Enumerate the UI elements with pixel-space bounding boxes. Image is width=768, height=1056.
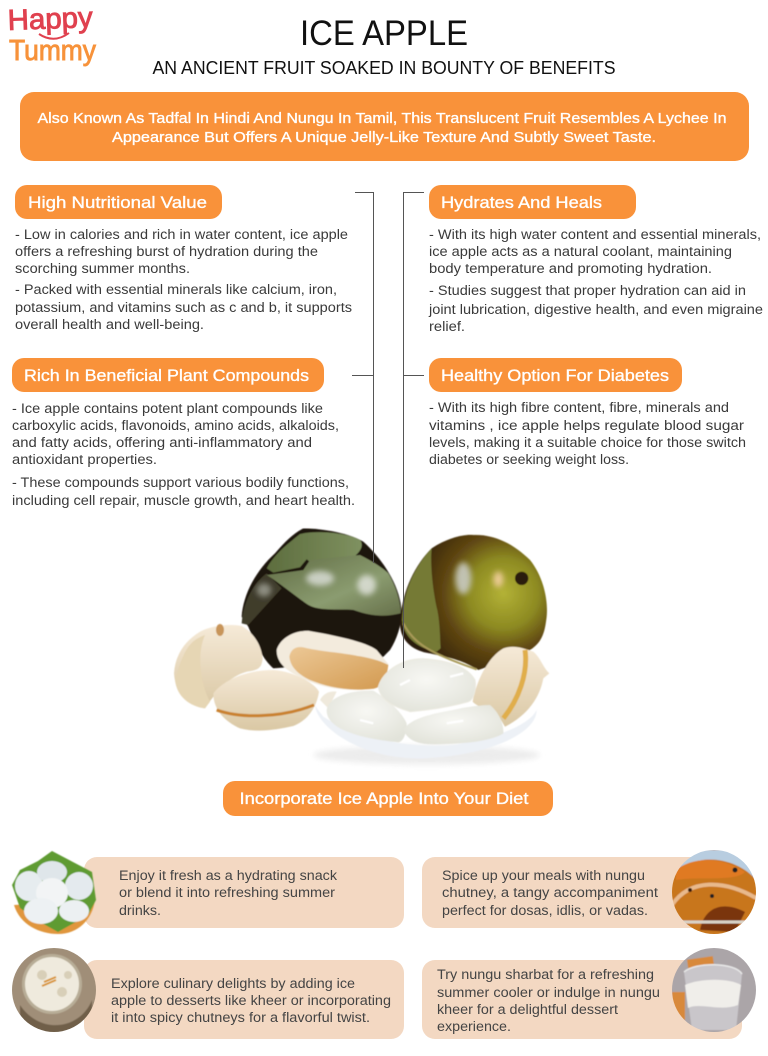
panel: high nutritional value: - Packed with essential minerals like calcium, iron, — [15, 282, 337, 297]
connector lines — [352, 192, 424, 668]
card: culinary delights — [11, 947, 404, 1039]
icon: bowl of ice apples — [12, 851, 96, 934]
panel: hydrates and heals: - Studies suggest that proper hydration can aid in — [429, 283, 746, 298]
card: nungu chutney — [422, 849, 757, 935]
heading: incorporate ice apple — [223, 781, 553, 816]
panel: high nutritional value — [15, 185, 352, 332]
panel: high nutritional value: - Low in calories and rich in water content, ice apple — [15, 227, 348, 242]
panel: healthy option for diabetes: levels, making it a suitable choice for those switch — [429, 435, 746, 450]
heading: healthy option for diabetes: Healthy Option For Diabetes — [441, 366, 669, 385]
white plate — [315, 705, 537, 758]
right whole fruit — [400, 535, 547, 670]
subtitle: AN ANCIENT FRUIT SOAKED IN BOUNTY OF BENEFITS — [152, 58, 616, 78]
jelly fruit pieces — [320, 659, 503, 744]
logo: Happy Tummy: Happy — [7, 2, 94, 37]
right seed — [473, 647, 549, 727]
panel: rich in beneficial plant compounds: antioxidant properties. — [12, 452, 157, 467]
heading: high nutritional value: High Nutritional Value — [28, 193, 207, 212]
plate shadow — [313, 746, 540, 764]
icon: chutney — [671, 849, 757, 935]
card: culinary delights: Explore culinary delights by adding ice — [111, 976, 355, 991]
panel: high nutritional value: potassium, and vitamins such as c and b, it supports — [15, 300, 352, 315]
heading: rich in beneficial plant compounds — [12, 358, 324, 392]
panel: rich in beneficial plant compounds: - These compounds support various bodily functions, — [12, 475, 349, 490]
logo: Happy Tummy — [7, 2, 96, 67]
heading: rich in beneficial plant compounds: Rich In Beneficial Plant Compounds — [24, 366, 309, 385]
card: nungu sharbat: experience. — [437, 1019, 511, 1034]
intro banner: Appearance But Offers A Unique Jelly-Like Texture And Subtly Sweet Taste. — [112, 129, 656, 146]
panel: rich in beneficial plant compounds: and fatty acids, offering anti-inflammatory and — [12, 435, 312, 450]
intro banner — [20, 92, 749, 161]
intro banner: Also Known As Tadfal In Hindi And Nungu In Tamil, This Translucent Fruit Resembles A Lychee In — [38, 110, 726, 127]
panel: hydrates and heals: joint lubrication, digestive health, and even migraine — [428, 302, 763, 317]
panel: hydrates and heals: - With its high water content and essential minerals, — [429, 227, 761, 242]
panel: high nutritional value: overall health and well-being. — [15, 317, 204, 332]
card: nungu sharbat: kheer for a delightful dessert — [437, 1002, 618, 1017]
logo: Happy Tummy: Tummy — [9, 35, 96, 67]
card: nungu sharbat: Try nungu sharbat for a refreshing — [437, 967, 654, 982]
amber seed centre — [277, 631, 388, 690]
heading: high nutritional value — [15, 185, 222, 219]
heading: hydrates and heals: Hydrates And Heals — [441, 193, 602, 212]
open seed front left — [213, 670, 319, 731]
card: fresh snack — [12, 851, 404, 934]
heading: incorporate ice apple: Incorporate Ice Apple Into Your Diet — [240, 789, 529, 808]
card: nungu chutney: Spice up your meals with nungu — [442, 868, 645, 883]
left whole fruit — [242, 528, 401, 668]
card: fresh snack: drinks. — [119, 903, 161, 918]
panel: rich in beneficial plant compounds: - Ice apple contains potent plant compounds like — [12, 401, 323, 416]
panel: high nutritional value: offers a refreshing burst of hydration during the — [15, 244, 318, 259]
heading: hydrates and heals — [429, 185, 636, 219]
card: culinary delights: it into spicy chutneys for a flavorful twist. — [111, 1010, 370, 1025]
panel: hydrates and heals: ice apple acts as a natural coolant, maintaining — [429, 244, 732, 259]
panel: rich in beneficial plant compounds: carboxylic acids, flavonoids, amino acids, alkaloids, — [12, 418, 339, 433]
panel: hydrates and heals — [428, 185, 763, 334]
card: nungu sharbat — [422, 947, 757, 1039]
heading: healthy option for diabetes — [429, 358, 682, 392]
panel: healthy option for diabetes: - With its high fibre content, fibre, minerals and — [429, 400, 729, 415]
panel: rich in beneficial plant compounds: including cell repair, muscle growth, and heart health. — [12, 493, 355, 508]
panel: high nutritional value: scorching summer months. — [15, 261, 190, 276]
card: nungu sharbat: summer cooler or indulge in nungu — [437, 985, 660, 1000]
card: nungu chutney: chutney, a tangy accompaniment — [442, 885, 658, 900]
title: ICE APPLE — [300, 14, 468, 53]
icon: sharbat glass — [671, 947, 757, 1033]
panel: healthy option for diabetes: vitamins , ice apple helps regulate blood sugar — [429, 418, 745, 433]
panel: hydrates and heals: relief. — [429, 319, 465, 334]
card: fresh snack: or blend it into refreshing summer — [119, 885, 336, 900]
panel: rich in beneficial plant compounds — [12, 358, 355, 508]
card: fresh snack: Enjoy it fresh as a hydrating snack — [119, 868, 337, 883]
panel: hydrates and heals: body temperature and promoting hydration. — [429, 261, 712, 276]
panel: healthy option for diabetes — [429, 358, 746, 467]
panel: healthy option for diabetes: diabetes or seeking weight loss. — [429, 452, 629, 467]
left seed — [174, 624, 263, 708]
icon: kheer bowl — [11, 947, 97, 1035]
card: nungu chutney: perfect for dosas, idlis, or vadas. — [442, 903, 648, 918]
illustration: ice apple fruits and plate — [174, 528, 549, 764]
card: culinary delights: apple to desserts like kheer or incorporating — [111, 993, 391, 1008]
